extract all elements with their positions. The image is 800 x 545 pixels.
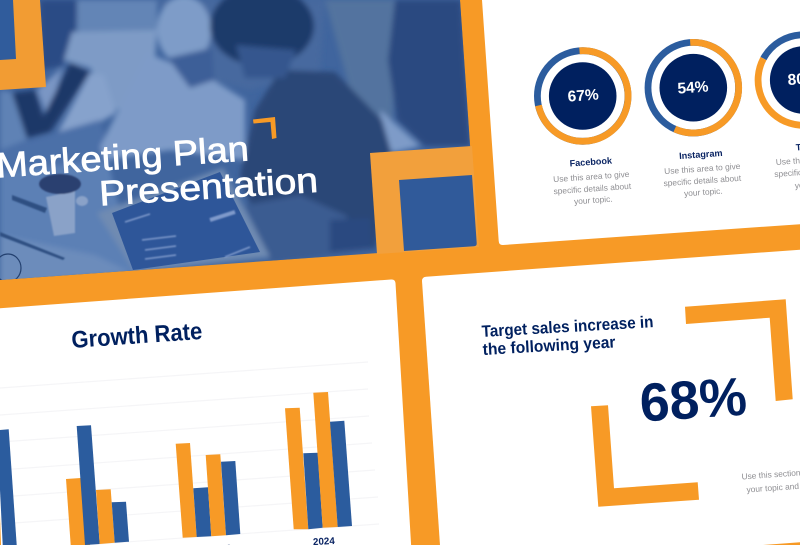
donut: Facebook 67%: specific details about [553, 181, 632, 196]
panel: target sales [422, 249, 800, 545]
bars: third group [176, 443, 240, 538]
donut: Facebook 67%: Facebook [569, 155, 613, 168]
photo with blue duotone [0, 0, 480, 285]
axis labels [228, 537, 335, 545]
donut: Instagram 54%: your topic. [684, 186, 723, 198]
big number: 68%: 68% [638, 367, 749, 433]
bracket: top right [685, 299, 793, 401]
small bracket accent [253, 117, 276, 139]
panel: title slide with photo [0, 0, 480, 285]
heading: target sales: the following year [482, 333, 617, 359]
donut: Instagram 54%: Use this area to give [664, 161, 741, 176]
donut: Twitter 80% [758, 35, 800, 190]
panel: social media donuts [482, 0, 800, 245]
donut: Facebook 67%: Use this area to give [553, 169, 630, 184]
donut: Instagram 54% [648, 42, 742, 198]
decorative corner: lower-right square [370, 146, 479, 254]
heading: target sales [481, 313, 654, 359]
donut: Facebook 67% [537, 51, 632, 206]
bracket: bottom left [591, 405, 699, 507]
title: Presentation [98, 161, 319, 213]
description: your topic and [746, 481, 800, 494]
cup [0, 174, 88, 260]
decorative corner: top-left square [0, 0, 46, 90]
bars: first group [0, 429, 17, 545]
bars: second group [66, 425, 129, 545]
title: Marketing Plan [0, 129, 250, 185]
bars: 2024 group [285, 392, 352, 529]
panel: growth rate chart [0, 270, 420, 545]
heading: Growth Rate: Growth Rate [71, 318, 203, 354]
heading: target sales: Target sales increase in [481, 313, 654, 341]
donut: Instagram 54%: Instagram [679, 148, 723, 161]
donut: Facebook 67%: 67% [567, 86, 599, 106]
donut: Facebook 67%: your topic. [574, 194, 613, 206]
tablet screen [112, 172, 260, 270]
donut: Instagram 54%: 54% [677, 78, 709, 98]
title [0, 129, 319, 213]
description [741, 467, 800, 494]
bar chart [0, 362, 379, 545]
donut: Instagram 54%: specific details about [663, 173, 742, 188]
